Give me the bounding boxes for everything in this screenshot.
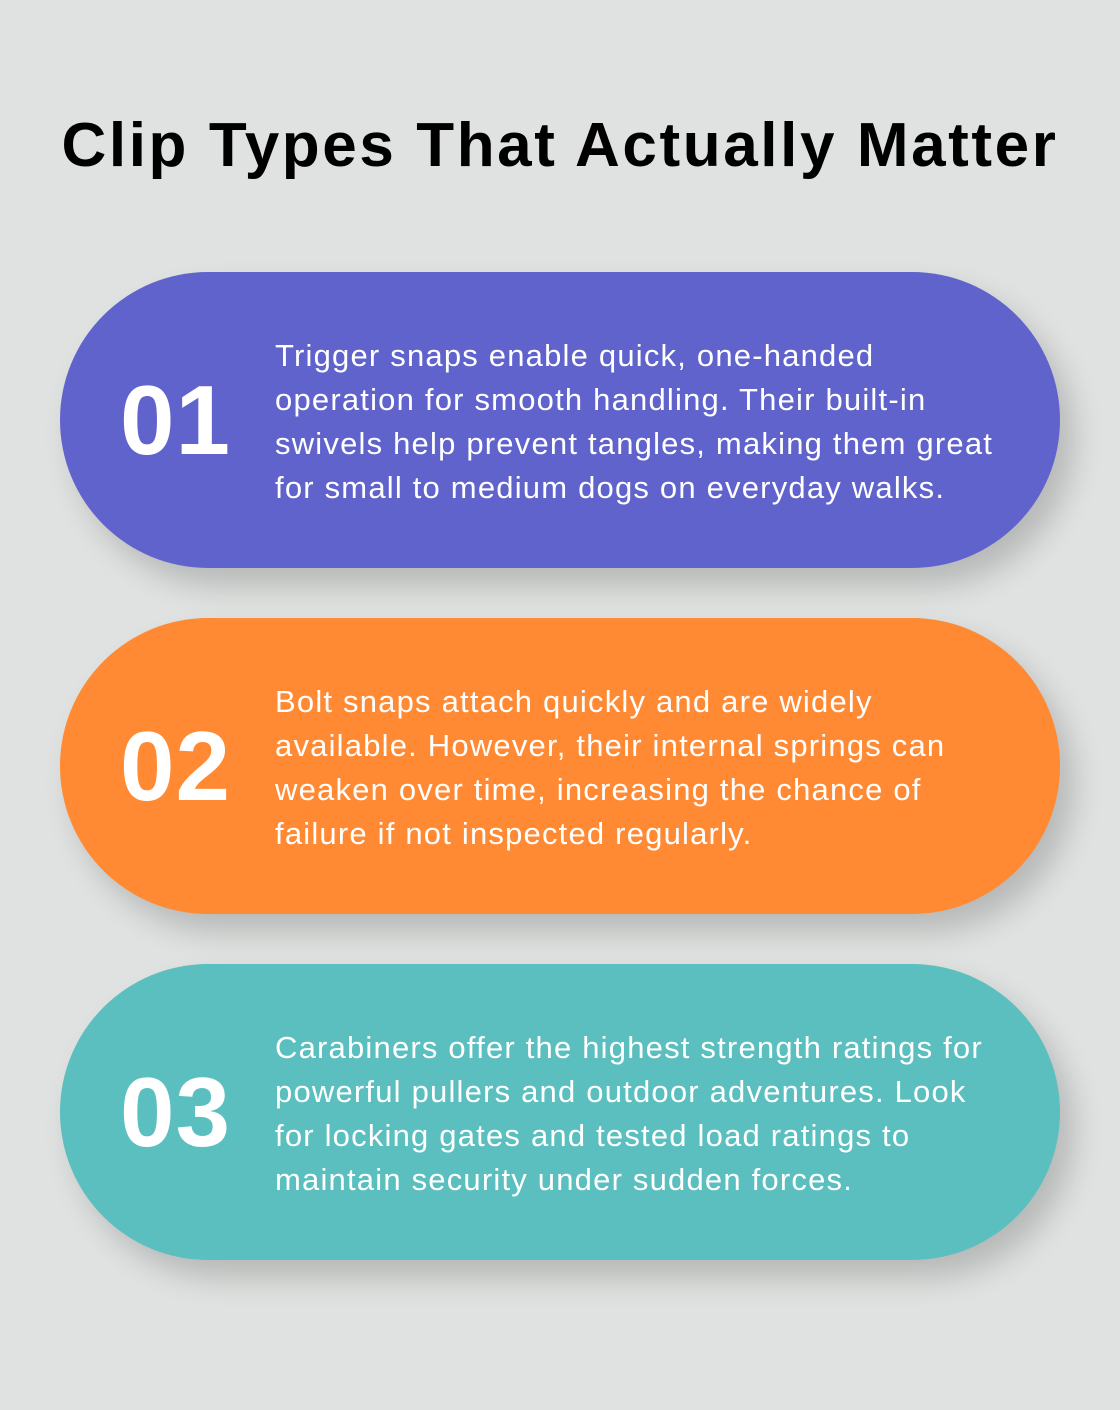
text block 02: Bolt snaps attach quickly and are widely bbox=[275, 684, 873, 719]
text block 03 bbox=[275, 1030, 983, 1197]
text block 02: available. However, their internal springs can bbox=[275, 728, 945, 763]
text block 03: for locking gates and tested load ratings to bbox=[275, 1118, 910, 1153]
text block 01: swivels help prevent tangles, making them great bbox=[275, 426, 993, 461]
text block 03: maintain security under sudden forces. bbox=[275, 1162, 853, 1197]
panel: carabiners bbox=[60, 964, 1060, 1260]
text block 02: failure if not inspected regularly. bbox=[275, 816, 752, 851]
text block 01: for small to medium dogs on everyday walks. bbox=[275, 470, 945, 505]
text block 03: powerful pullers and outdoor adventures. Look bbox=[275, 1074, 967, 1109]
number 01: 01 bbox=[120, 365, 231, 475]
number 02: 02 bbox=[120, 711, 231, 821]
text block 01: Trigger snaps enable quick, one-handed bbox=[275, 338, 874, 373]
number 03: 03 bbox=[120, 1057, 231, 1167]
title: Clip Types That Actually Matter bbox=[62, 111, 1058, 180]
text block 03: Carabiners offer the highest strength ratings for bbox=[275, 1030, 983, 1065]
text block 02 bbox=[275, 684, 945, 851]
text block 01 bbox=[275, 338, 993, 505]
text block 01: operation for smooth handling. Their built-in bbox=[275, 382, 926, 417]
panel: bolt snaps bbox=[60, 618, 1060, 914]
text block 02: weaken over time, increasing the chance of bbox=[275, 772, 922, 807]
panel: trigger snaps bbox=[60, 272, 1060, 568]
